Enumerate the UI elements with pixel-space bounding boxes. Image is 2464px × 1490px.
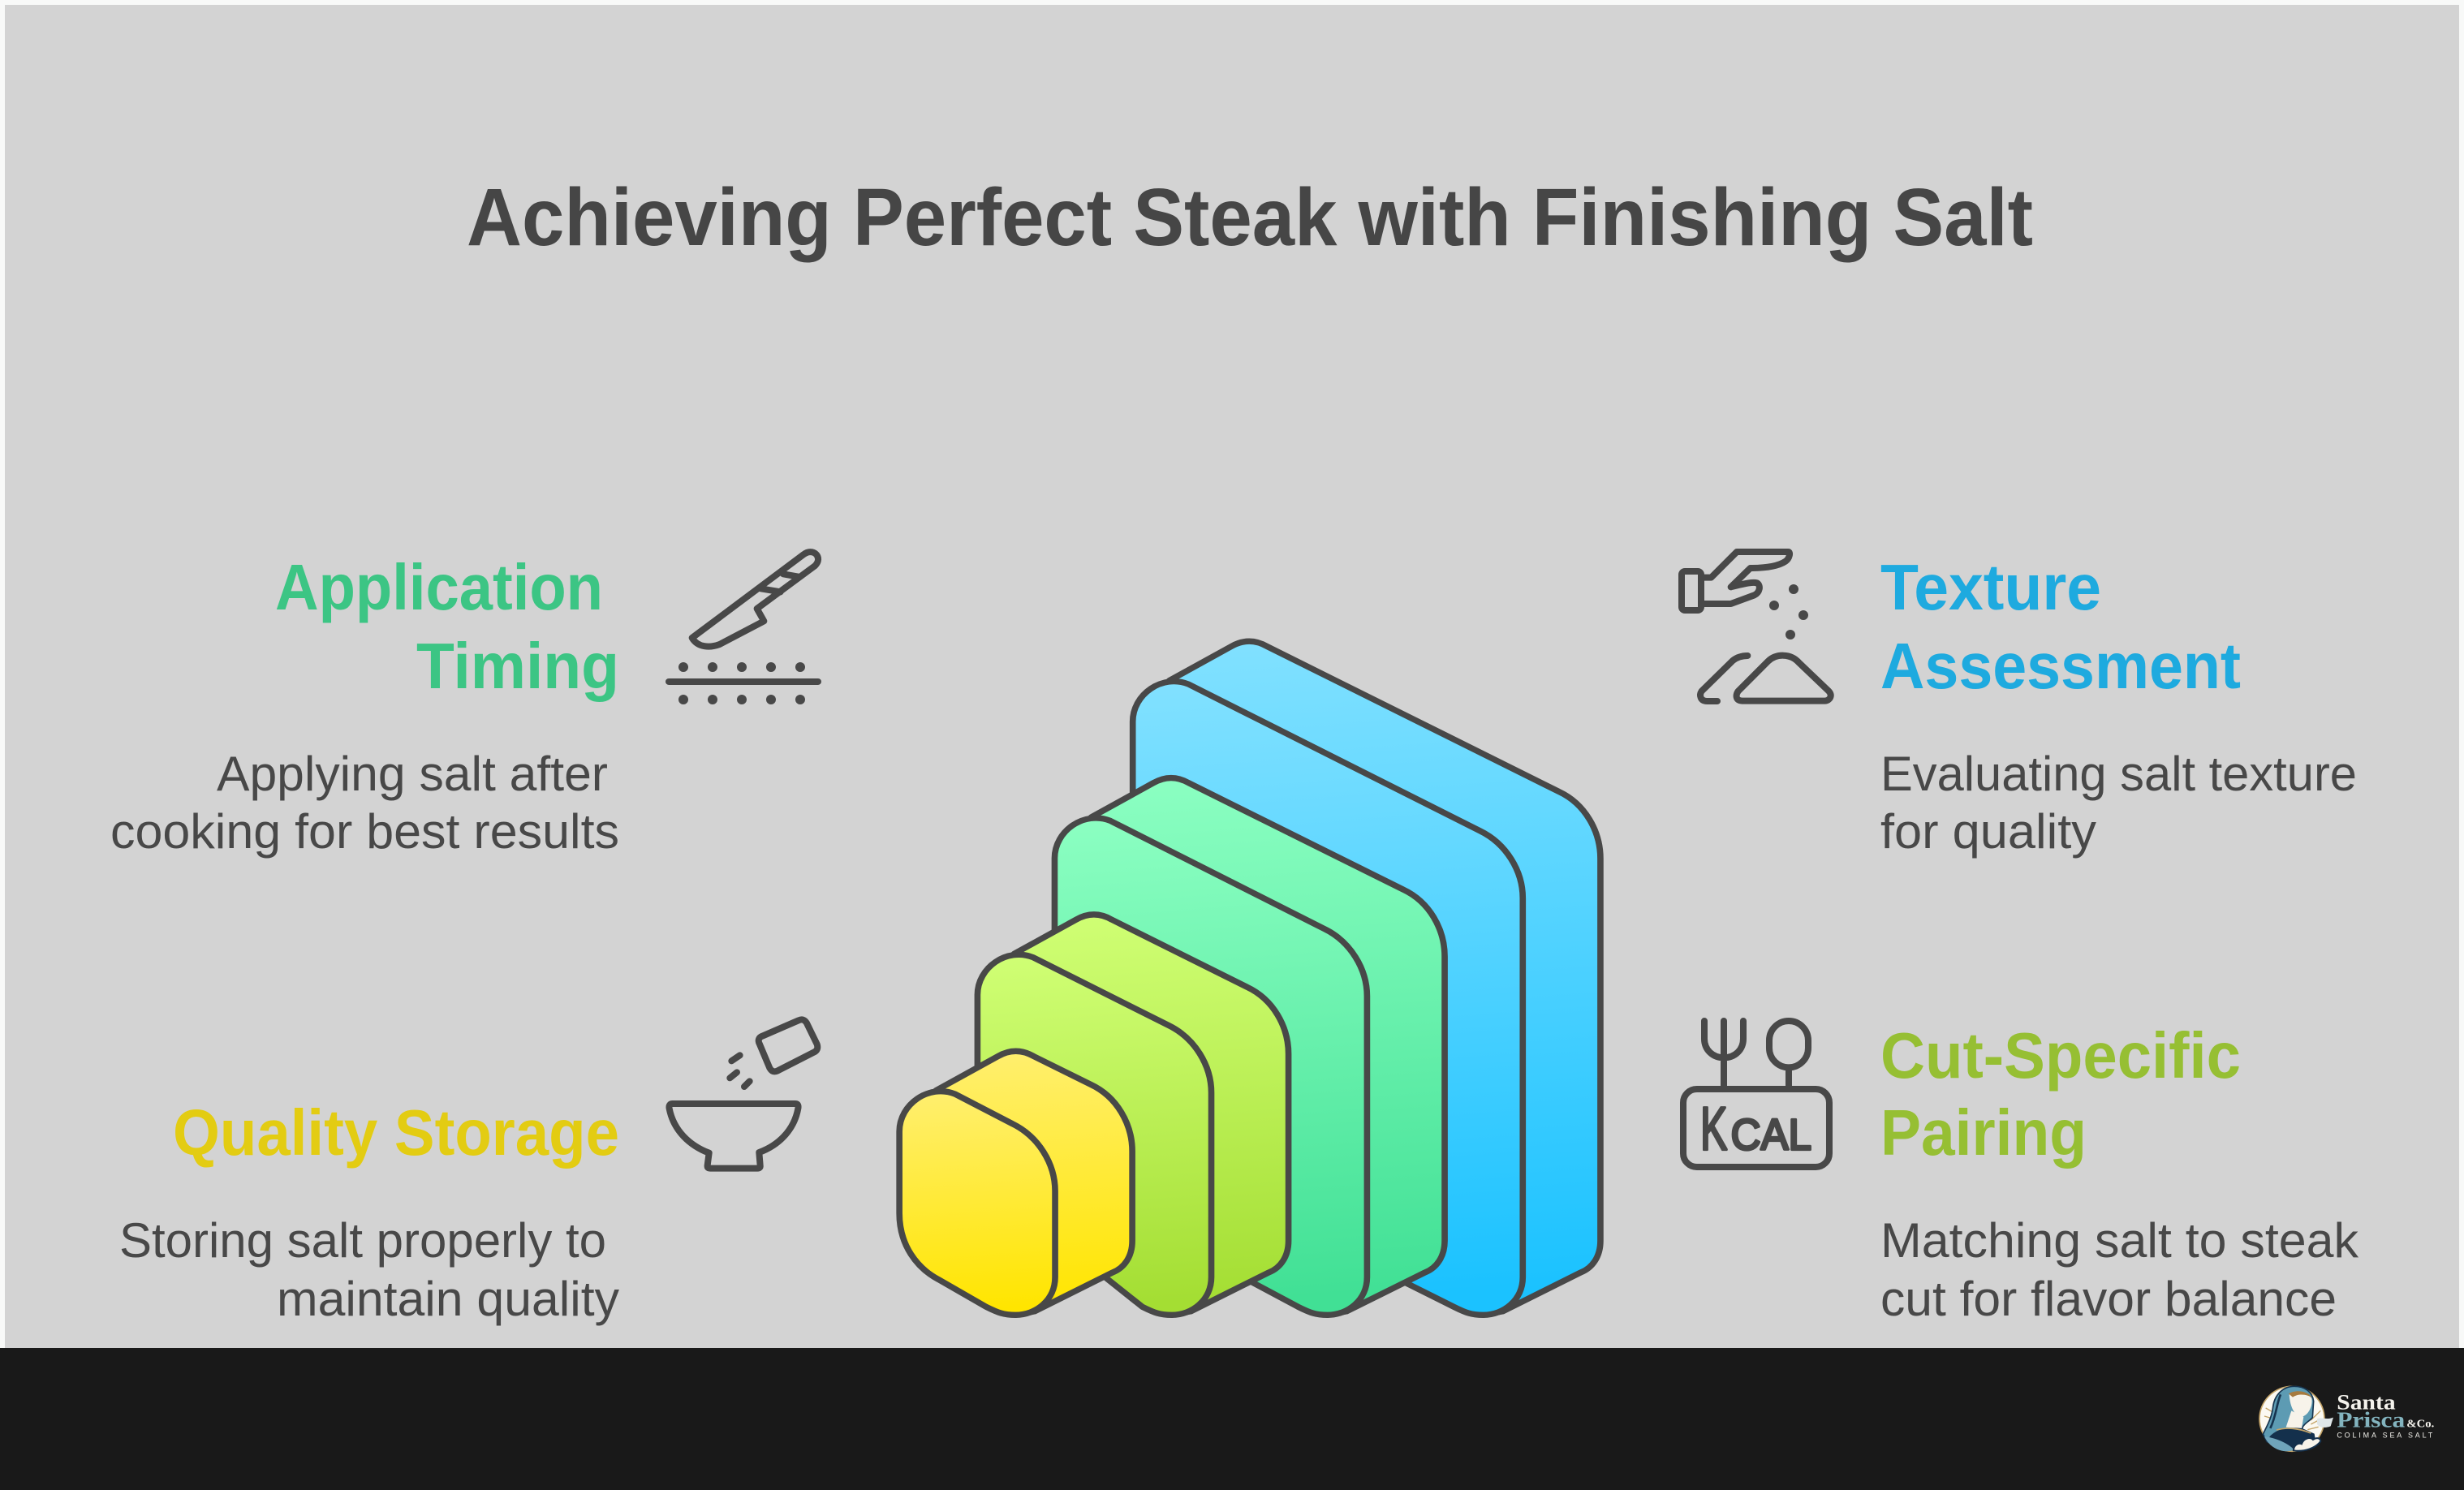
icon: fork spoon kcal sign: CAL xyxy=(1731,1112,1811,1160)
description: application timing: cooking for best results xyxy=(110,804,619,859)
description: application timing xyxy=(110,747,619,859)
logo wordmark: COLIMA SEA SALT xyxy=(2337,1432,2433,1440)
heading: texture assessment xyxy=(1880,551,2241,702)
heading: cut-specific pairing: Pairing xyxy=(1880,1096,2087,1169)
description: texture assessment: for quality xyxy=(1880,804,2096,859)
heading: quality storage: Quality Storage xyxy=(173,1096,619,1169)
description: quality storage xyxy=(119,1213,619,1326)
heading: application timing: Timing xyxy=(416,630,619,702)
icon: fork spoon kcal sign: K xyxy=(1700,1095,1727,1163)
layer: blue xyxy=(1133,641,1600,1315)
layer: yellow xyxy=(899,1051,1132,1315)
layer: green xyxy=(1054,778,1445,1315)
description: application timing: Applying salt after xyxy=(217,747,608,801)
heading: texture assessment: Assessment xyxy=(1880,630,2241,702)
icon: salt falling into bowl xyxy=(669,1019,817,1169)
description: texture assessment: Evaluating salt texture xyxy=(1880,747,2357,801)
icon: hand sprinkling salt on pile xyxy=(1682,552,1831,701)
block: cut-specific pairing xyxy=(1880,1019,2359,1326)
heading: application timing: Application xyxy=(275,551,603,623)
logo emblem xyxy=(2259,1386,2333,1451)
description: quality storage: maintain quality xyxy=(277,1272,619,1326)
isometric stacked layers chart xyxy=(899,641,1600,1315)
description: cut-specific pairing xyxy=(1880,1213,2359,1326)
heading: texture assessment: Texture xyxy=(1880,551,2101,623)
logo wordmark: &Co. xyxy=(2406,1419,2434,1431)
logo wordmark: Santa xyxy=(2337,1390,2396,1415)
title: Achieving Perfect Steak with Finishing Salt xyxy=(467,172,2033,263)
block: application timing xyxy=(110,551,619,859)
logo wordmark xyxy=(2337,1390,2434,1440)
description: cut-specific pairing: Matching salt to steak xyxy=(1880,1213,2359,1268)
logo: santa prisca xyxy=(2259,1386,2434,1451)
footer bar xyxy=(0,1348,2464,1490)
logo wordmark: Prisca xyxy=(2337,1407,2406,1432)
heading: cut-specific pairing: Cut-Specific xyxy=(1880,1019,2241,1092)
icon: knife over salt dots xyxy=(669,552,818,704)
block: texture assessment xyxy=(1880,551,2357,859)
description: texture assessment xyxy=(1880,747,2357,859)
layer: lime xyxy=(977,915,1289,1315)
heading: cut-specific pairing xyxy=(1880,1019,2241,1169)
block: quality storage xyxy=(119,1096,619,1326)
heading: application timing xyxy=(275,551,619,702)
description: quality storage: Storing salt properly to xyxy=(119,1213,606,1268)
icon: fork spoon kcal sign xyxy=(1683,1021,1829,1167)
description: cut-specific pairing: cut for flavor balance xyxy=(1880,1272,2337,1326)
